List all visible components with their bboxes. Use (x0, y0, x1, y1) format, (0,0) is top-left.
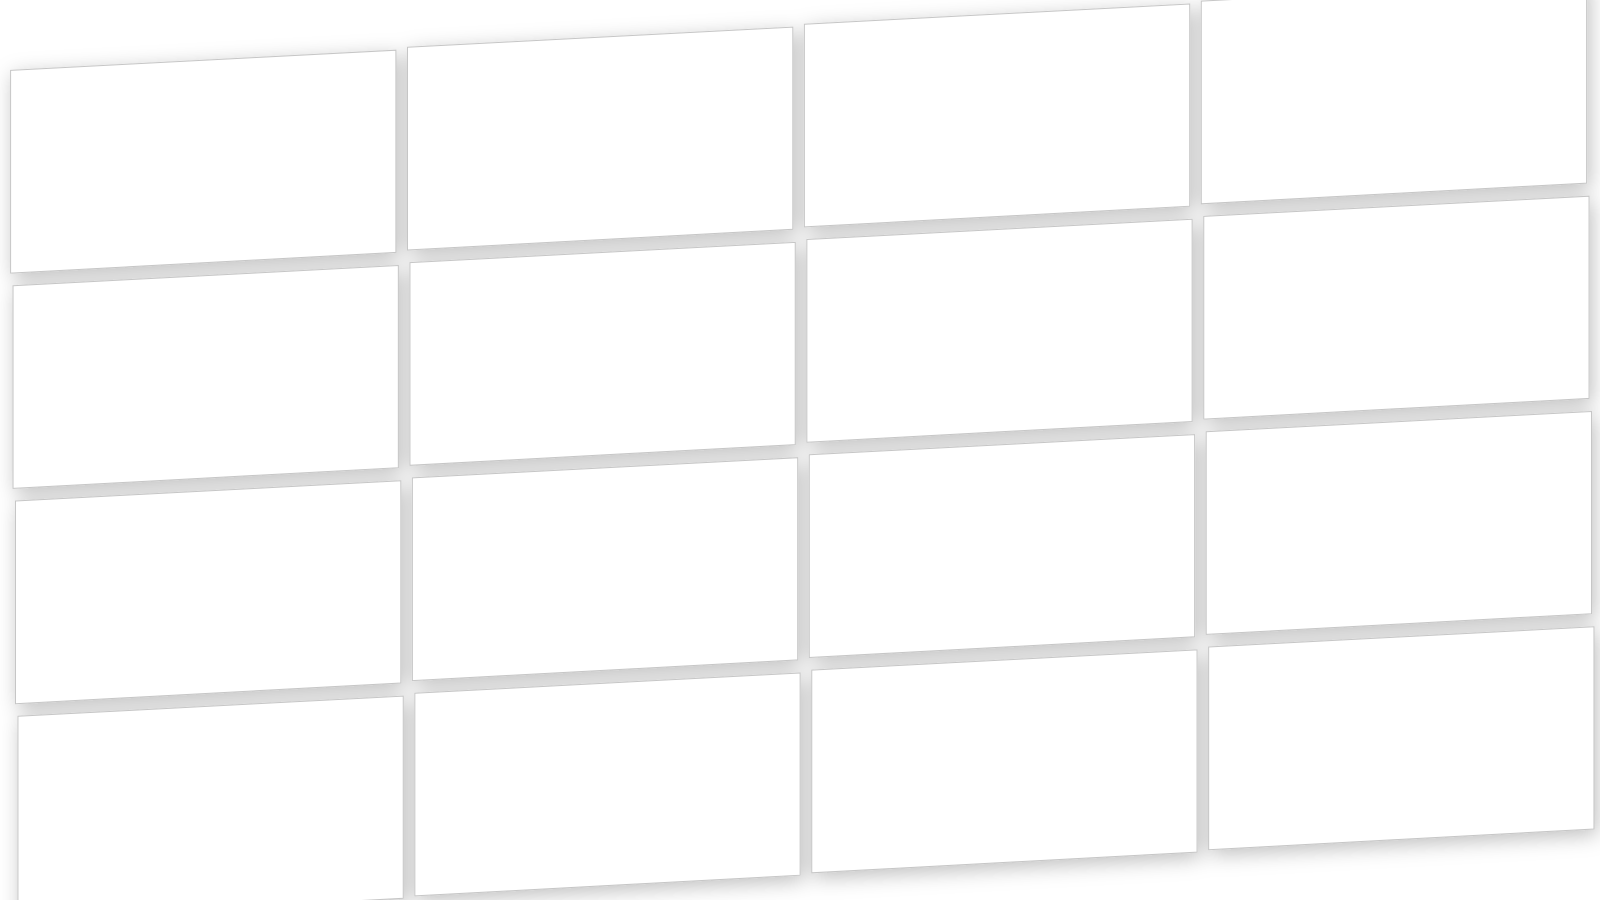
card: row 3 column 3 (809, 435, 1195, 658)
card: row 1 column 4 (1201, 0, 1587, 204)
card: row 4 column 4 (1209, 627, 1594, 850)
card: row 1 column 3 (804, 4, 1190, 227)
card: row 3 column 4 (1206, 412, 1592, 634)
card: row 1 column 2 (408, 27, 793, 250)
card: row 1 column 1 (11, 50, 396, 273)
card: row 3 column 2 (412, 458, 798, 681)
card: row 4 column 2 (415, 673, 800, 896)
card: row 2 column 3 (807, 219, 1192, 442)
card: row 2 column 1 (13, 266, 398, 488)
card: row 3 column 1 (16, 481, 401, 704)
card: row 2 column 2 (410, 242, 795, 465)
card: row 2 column 4 (1204, 196, 1589, 419)
card: row 4 column 1 (18, 696, 403, 900)
card: row 4 column 3 (812, 650, 1197, 873)
